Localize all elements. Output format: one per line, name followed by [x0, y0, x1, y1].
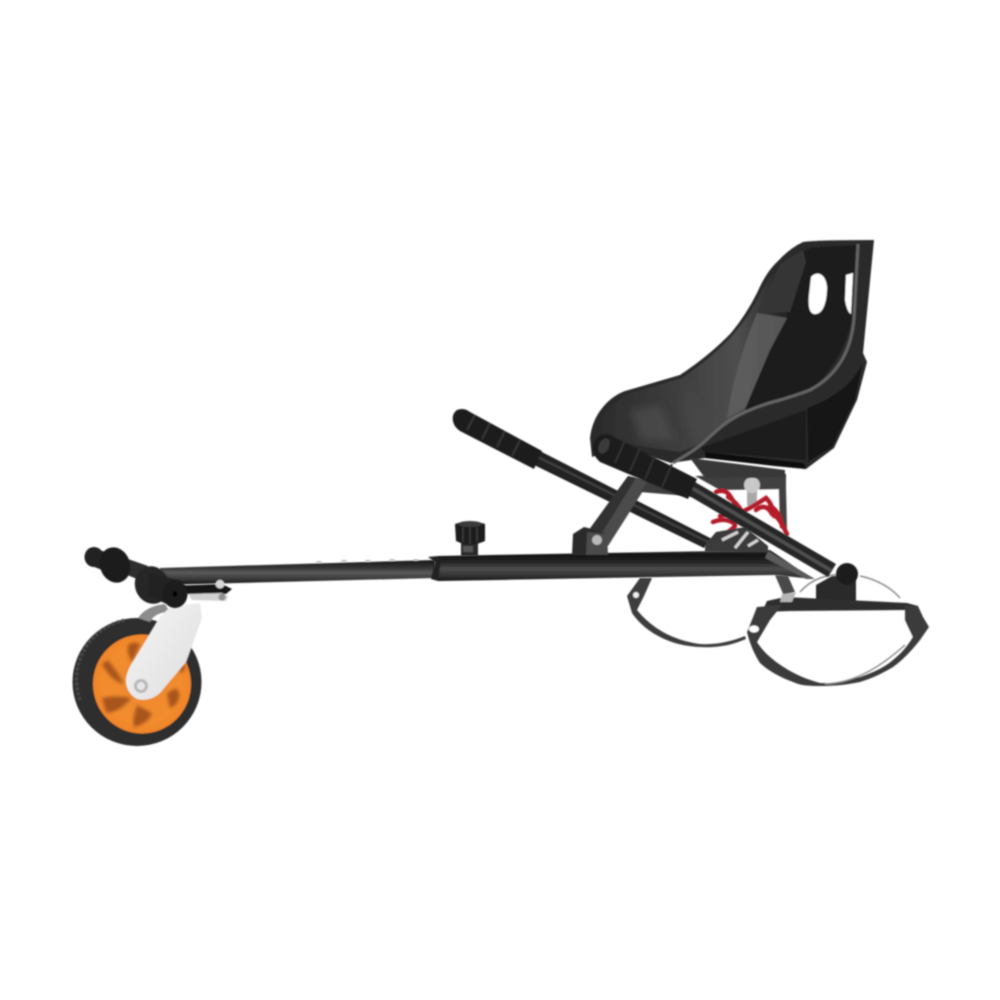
rear footrest strap — [627, 575, 900, 647]
seat back shading — [745, 245, 857, 410]
seat rim — [673, 244, 858, 463]
axle bolt — [134, 679, 148, 693]
seat pan highlights — [680, 378, 715, 445]
frame bracket — [765, 551, 815, 579]
seat — [590, 240, 874, 478]
red coils — [713, 491, 787, 538]
left handle grip — [453, 409, 542, 469]
front wheel — [72, 603, 202, 746]
hub vanes — [102, 643, 186, 727]
rear axle and far grip — [84, 543, 148, 587]
seat back shoulder — [757, 250, 806, 313]
adjustment holes — [316, 559, 419, 563]
far grip — [84, 547, 104, 567]
rear telescopic tube — [160, 560, 435, 585]
spring mount — [695, 474, 787, 530]
orange hub — [93, 634, 191, 734]
near grip — [130, 561, 188, 609]
bracket — [572, 527, 607, 555]
adjustment knob — [455, 521, 485, 556]
pivot cap — [836, 563, 858, 585]
strap — [747, 605, 929, 686]
seat base — [690, 458, 785, 478]
swivel arm — [138, 604, 170, 622]
seat centre highlight — [727, 313, 787, 418]
fork mount — [168, 580, 232, 601]
foot plate — [762, 597, 918, 612]
front main tube — [428, 550, 815, 581]
axle rod — [120, 558, 148, 581]
seat slot right — [845, 273, 853, 314]
right handle tube — [686, 482, 836, 577]
front footrest and strap — [747, 563, 929, 686]
shock linkage — [705, 527, 768, 552]
folding strut and bracket — [572, 476, 700, 555]
pivot block — [816, 576, 856, 601]
seat shell — [590, 240, 874, 469]
seat slot left — [809, 274, 827, 314]
suspension spring — [695, 474, 787, 552]
right handle grip — [593, 434, 697, 499]
left handle bar — [453, 409, 712, 548]
left handle tube — [530, 449, 712, 548]
tyre — [72, 618, 202, 746]
right handle bar — [593, 434, 836, 577]
seat interior — [592, 245, 857, 452]
seat lower side — [705, 452, 806, 469]
white fork — [126, 603, 202, 700]
